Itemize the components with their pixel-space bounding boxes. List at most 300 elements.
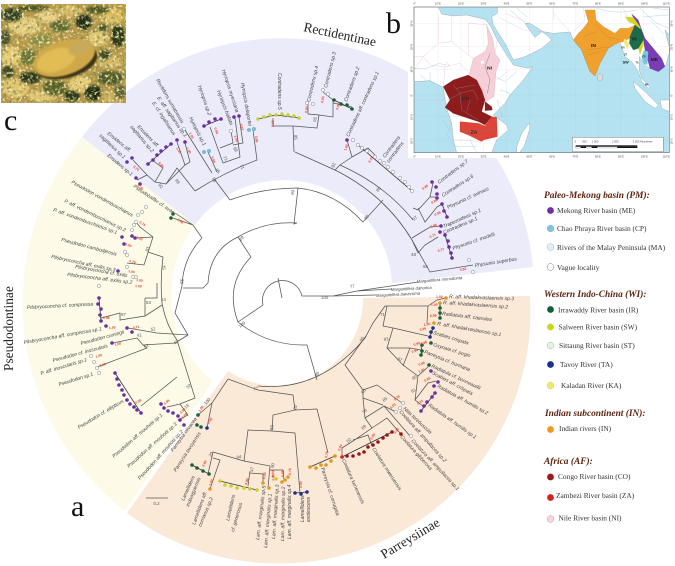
map longitude and latitude ticks: 30°E xyxy=(481,154,487,158)
map longitude and latitude ticks: 90°E xyxy=(618,154,624,158)
labels: bootstrap support values: 85 xyxy=(314,370,321,378)
labels: bootstrap support values: 16 xyxy=(183,402,191,410)
labels: Pseudodontinae species names: Pilsbryoconcha aff. compressa sp.1 xyxy=(23,326,102,346)
panel label: c: c xyxy=(4,104,17,137)
labels: posterior probabilities in red: 0.96 xyxy=(393,427,400,435)
panel: map background frame xyxy=(408,0,675,158)
labels: bootstrap support values: 90 xyxy=(270,462,275,468)
map scale box: 500 xyxy=(582,140,587,144)
map longitude and latitude ticks: 10°E xyxy=(435,2,441,6)
labels: posterior probabilities in red: 0.75 xyxy=(288,468,292,475)
heading: Parreysiinae: Parreysiinae xyxy=(378,515,442,562)
legend item: Irrawaddy: Irrawaddy River basin (IR) xyxy=(558,306,639,314)
labels: posterior probabilities in red: 0.91 xyxy=(416,399,424,406)
labels: posterior probabilities in red: 1.00 xyxy=(188,132,195,140)
labels: Parreysiinae species names: R. aff. khadakvaslaensis sp.3 xyxy=(449,294,514,302)
labels: Parreysiinae species names: Coelatura aff. ampullacea sp.1 xyxy=(410,438,460,492)
labels: posterior probabilities in red: 1.00 xyxy=(95,353,103,359)
labels: outgroup Margaritifera species: Margaritifera laevissima xyxy=(376,291,421,298)
map longitude and latitude ticks: 30°N xyxy=(670,21,674,27)
labels: bootstrap support values: 100 xyxy=(237,320,247,329)
labels: posterior probabilities in red: 1.00 xyxy=(136,184,144,191)
labels: Rectidentinae species names: sagittarius sp.1 xyxy=(98,133,126,161)
labels: Rectidentinae species names: Hyriopsis bialata xyxy=(215,90,234,126)
labels: posterior probabilities in red: 1.00 xyxy=(233,135,239,143)
labels: posterior probabilities in red: 1.00 xyxy=(136,235,143,242)
map region: Mekong xyxy=(632,14,665,72)
labels: Pseudodontinae species names: Pseudodon aff. mouhotii sp.1 xyxy=(111,412,164,460)
labels: posterior probabilities in red: 0.98 xyxy=(430,198,438,205)
map longitude and latitude ticks: 50°E xyxy=(526,2,532,6)
labels: bootstrap support values: 89 xyxy=(238,234,245,242)
labels: bootstrap support values: 53 xyxy=(146,300,151,305)
labels: bootstrap support values: 93 xyxy=(383,336,390,342)
chart: tip dots Indian rivers orange xyxy=(208,296,448,491)
map scale box: 1 000 xyxy=(592,140,599,144)
map longitude and latitude ticks: 40°E xyxy=(504,154,510,158)
panel label: b: b xyxy=(386,7,401,40)
map basin codes: CO xyxy=(462,96,469,102)
labels: outgroup Margaritifera species: Margaritifera monodonta xyxy=(417,275,463,284)
labels: posterior probabilities in red: 0.82 xyxy=(459,267,467,272)
labels: bootstrap support values: 98 xyxy=(211,177,218,183)
panel: Rectidentinae sector background xyxy=(82,38,533,283)
chart: tip dots Chao Phraya blue xyxy=(202,127,256,154)
map graticule xyxy=(414,7,669,153)
map scale box: 0 xyxy=(575,140,577,144)
legend item: Chao Phraya: Chao Phraya River basin (CP) xyxy=(557,224,647,233)
labels: Parreysiinae species names: Lamellidens aff. xyxy=(191,491,209,526)
labels: Parreysiinae species names: Parreysia cf. burmana xyxy=(423,349,471,373)
labels: Parreysiinae species names: Lam. aff. marginalis sp.3 xyxy=(271,484,281,539)
labels: Parreysiinae species names: R. aff. khadakvaslaensis sp.1 xyxy=(437,321,502,338)
map region: Nile xyxy=(469,25,500,102)
labels: Parreysiinae species names: corrianus sp.2 xyxy=(197,496,215,528)
labels: posterior probabilities in red: 1.00 xyxy=(125,242,132,248)
labels: bootstrap support values: 81 xyxy=(410,387,417,394)
labels: Rectidentinae species names: Hyriopsis delaportei xyxy=(239,82,253,127)
labels: Rectidentinae species names xyxy=(98,51,518,269)
labels: bootstrap support values: 41 xyxy=(136,332,143,338)
chart: thickened terminal branches xyxy=(99,100,452,493)
labels: bootstrap support values: 85 xyxy=(359,335,366,342)
panel label: a: a xyxy=(71,490,84,523)
heading: Rectidentinae: Rectidentinae xyxy=(302,19,378,49)
labels: bootstrap support values: 14 xyxy=(161,297,166,302)
labels: outgroup Margaritifera species xyxy=(376,275,463,298)
map longitude and latitude ticks: 20°E xyxy=(458,2,464,6)
labels: bootstrap support values: 99 xyxy=(290,189,295,195)
map rivers over Africa xyxy=(448,53,495,132)
map rivers over India xyxy=(583,23,620,55)
map longitude and latitude ticks: 60°E xyxy=(549,154,555,158)
labels: bootstrap support values: 99 xyxy=(232,146,239,153)
labels: Rectidentinae species names: E. aff. sagittarius sp.1 xyxy=(155,96,188,139)
labels: posterior probabilities in red: 1.00 xyxy=(109,325,116,330)
map longitude and latitude ticks: 70°E xyxy=(572,154,578,158)
labels: Rectidentinae species names: sagittarius sp.2 xyxy=(128,124,155,154)
labels: bootstrap support values: 71 xyxy=(380,312,385,317)
labels: posterior probabilities in red: 0.98 xyxy=(176,218,184,225)
labels: Rectidentinae species names: Hyriopsis sp.1 xyxy=(187,116,207,147)
labels: Parreysiinae species names: Nitia teretiuscula xyxy=(402,406,433,436)
labels: Parreysiinae species names: indawgyiensis xyxy=(185,476,203,508)
map basin codes: NI xyxy=(487,66,493,72)
labels: bootstrap support values: 52 xyxy=(150,326,157,332)
icon: mussel shell xyxy=(32,38,98,80)
labels: Parreysiinae species names: Parreysia cf. corrugata xyxy=(319,467,340,517)
labels: Pseudodontinae species names xyxy=(23,180,185,481)
labels: Pseudodontinae species names: P. aff. vondembuschianus sp.1 xyxy=(52,207,118,236)
labels: bootstrap support values: 71 xyxy=(222,155,229,162)
legend heading: Indian subcontinent: Indian subcontinent (IN): xyxy=(544,408,646,419)
labels: posterior probabilities in red: 0.98 xyxy=(244,478,250,485)
labels: posterior probabilities in red: 0.99 xyxy=(430,313,437,318)
labels: posterior probabilities in red: 0.94 xyxy=(299,481,303,488)
labels: bootstrap support values: 47 xyxy=(249,466,255,472)
map longitude and latitude ticks: 10°N xyxy=(409,67,413,73)
labels: posterior probabilities in red: 0.94 xyxy=(411,348,419,354)
legend item: Mekong: Mekong River basin (ME) xyxy=(557,206,636,215)
labels: Pseudodontinae species names: Pilsbryoconcha aff. exilis sp.3 xyxy=(51,254,116,274)
labels: Parreysiinae species names: Scabies aff. crispata xyxy=(431,370,474,397)
map region: Chao Phraya xyxy=(642,50,648,65)
labels: posterior probabilities in red: 0.96 xyxy=(418,361,426,367)
map longitude and latitude ticks: 110°E xyxy=(663,154,670,158)
legend item: vague locality: Vague locality xyxy=(557,263,600,272)
labels: posterior probabilities in red: 0.90 xyxy=(271,120,275,127)
map longitude and latitude ticks: 20°S xyxy=(409,138,413,144)
scale bar: 0.2 xyxy=(154,501,160,506)
map basin codes: SW xyxy=(623,60,629,64)
labels: Rectidentinae species names: Contradens sp.3 xyxy=(323,51,338,88)
map land: Africa xyxy=(414,7,533,153)
map region: Irrawaddy xyxy=(629,25,643,50)
map frame xyxy=(414,7,669,153)
labels: posterior probabilities in red: 0.98 xyxy=(335,103,341,110)
labels: posterior probabilities in red: 0.77 xyxy=(429,233,437,239)
legend heading: Paleo-Mekong: Paleo-Mekong basin (PM): xyxy=(544,190,650,201)
labels: posterior probabilities in red: 0.92 xyxy=(239,123,244,131)
labels: Rectidentinae species names: Ensidens aff. xyxy=(106,131,132,154)
labels: Parreysiinae species names: Lam. aff. marginalis sp.4 xyxy=(287,484,293,539)
map basin codes: KA xyxy=(621,47,625,50)
labels: bootstrap support values: 99 xyxy=(411,374,418,381)
labels: posterior probabilities in red: 0.96 xyxy=(434,210,442,217)
map sea xyxy=(414,7,669,153)
labels: Pseudodontinae species names: P. aff. inoscularis sp.1 xyxy=(40,357,88,377)
labels: Parreysiinae species names: Radiatula aff. humilis sp.2 xyxy=(436,384,489,417)
map basin codes: MA xyxy=(645,83,649,86)
labels: posterior probabilities in red: 0.86 xyxy=(262,472,267,479)
labels: posterior probabilities in red: 0.96 xyxy=(210,156,216,164)
outgroup root branches xyxy=(238,278,418,322)
map longitude and latitude ticks: 10°E xyxy=(435,154,441,158)
labels: Parreysiinae species names: Lamellidens xyxy=(300,495,306,522)
labels: bootstrap support values: 77 xyxy=(350,284,356,289)
labels: Rectidentinae species names: Contradens sp.6 xyxy=(441,174,475,199)
labels: bootstrap support values: 86 xyxy=(360,387,367,395)
labels: Rectidentinae species names: Ensidens aff. xyxy=(136,124,160,149)
labels: bootstrap support values: 94 xyxy=(236,454,243,460)
labels: Pseudodontinae species names: Pseudodon sp.1 xyxy=(58,372,94,388)
map region: India xyxy=(573,10,635,76)
labels: posterior probabilities in red: 0.85 xyxy=(201,460,208,467)
panel: legend xyxy=(543,190,666,522)
labels: posterior probabilities in red: 1.00 xyxy=(208,479,214,486)
map longitude and latitude ticks: 0° xyxy=(670,94,674,97)
labels: Parreysiinae species names: cf. generosus xyxy=(230,502,244,533)
labels: bootstrap support values: 85 xyxy=(381,395,389,403)
chart: tip dots Mekong purple xyxy=(96,114,454,427)
labels: Rectidentinae species names: E. cf. ingallsianus xyxy=(150,101,177,137)
labels: bootstrap support values: 99 xyxy=(174,178,181,185)
labels: posterior probabilities in red: 1.00 xyxy=(128,269,135,274)
labels: posterior probabilities in red: 0.85 xyxy=(157,161,165,169)
labels: posterior probabilities in red: 1.00 xyxy=(436,295,443,299)
labels: Rectidentinae species names: Contradens sp.4 xyxy=(306,65,320,102)
labels: Parreysiinae species names: Lam. aff. marginalis sp.1 xyxy=(263,493,274,548)
labels: bootstrap support values: 100 xyxy=(321,295,329,300)
labels: posterior probabilities in red: 1.00 xyxy=(198,405,205,413)
labels: posterior probabilities in red: 0.94 xyxy=(337,444,343,451)
labels: bootstrap support values: 89 xyxy=(360,423,368,431)
labels: Parreysiinae species names: Radiatula aff. humilis sp.1 xyxy=(427,403,477,441)
labels: posterior probabilities in red: 0.96 xyxy=(420,340,428,346)
map land: Eurasia xyxy=(492,7,670,88)
labels: posterior probabilities in red: 0.79 xyxy=(129,259,136,265)
chart: tip dots Tavoy navy xyxy=(205,326,435,496)
map longitude and latitude ticks: 50°E xyxy=(526,154,532,158)
labels: Parreysiinae species names: R. aff. khadakvaslaensis sp.2 xyxy=(443,300,508,311)
labels: bootstrap support values: 93 xyxy=(144,246,151,252)
labels: bootstrap support values: 55 xyxy=(423,264,428,269)
labels: Rectidentinae species names: Ensidens sp.1 xyxy=(106,153,134,178)
labels: posterior probabilities in red: 1.00 xyxy=(175,146,182,154)
map longitude and latitude ticks: 100°E xyxy=(641,2,648,6)
scale bar xyxy=(146,498,168,506)
legend item: Indian rivers: Indian rivers (IN) xyxy=(559,424,612,433)
map longitude and latitude ticks: 80°E xyxy=(595,154,601,158)
map longitude and latitude ticks xyxy=(409,2,674,158)
labels: Parreysiinae species names: Coelatura mweruensis xyxy=(370,447,403,492)
labels: posterior probabilities in red: 1.00 xyxy=(389,402,397,410)
map borders in pink xyxy=(414,7,630,143)
legend item: Kaladan: Kaladan River (KA) xyxy=(561,381,622,390)
labels: Parreysiinae species names: Coelatura kunenensis xyxy=(340,458,366,505)
labels: bootstrap support values: 29 xyxy=(208,450,215,458)
labels: Pseudodontinae species names: Pseudodon aff. mouhotii sp.2 xyxy=(137,429,185,481)
map longitude and latitude ticks: 0° xyxy=(409,94,413,97)
labels: bootstrap support values: 32 xyxy=(185,382,193,390)
labels: posterior probabilities in red: 0.83 xyxy=(99,362,107,368)
labels: posterior probabilities in red: 1.00 xyxy=(136,278,143,283)
map scale box xyxy=(572,137,663,152)
labels: Pseudodontinae species names: Pseudodon cumingii xyxy=(80,329,126,347)
labels: posterior probabilities in red: 0.96 xyxy=(419,326,427,332)
labels: posterior probabilities in red: 0.76 xyxy=(138,220,146,227)
labels: bootstrap support values: 95 xyxy=(293,135,298,141)
labels: Rectidentinae species names: Hyriopsis sp.2 xyxy=(196,85,212,117)
labels: Rectidentinae species names: Trapezoideus sp.1 xyxy=(442,208,482,230)
legend heading: Africa: Africa (AF): xyxy=(543,456,593,467)
labels: bootstrap support values: 86 xyxy=(363,213,370,221)
labels: posterior probabilities in red: 0.95 xyxy=(430,223,438,229)
labels: bootstrap support values: 86 xyxy=(375,185,382,193)
map basin codes: ST xyxy=(624,55,628,57)
labels: bootstrap support values: 97 xyxy=(397,356,403,363)
map Nile lake xyxy=(481,61,484,64)
map basin codes: TA xyxy=(636,61,639,64)
labels: Pseudodontinae species names: Pseudodon cambodjensis xyxy=(60,237,118,258)
labels: posterior probabilities in red: 0.41 xyxy=(367,156,374,164)
labels: outgroup Margaritifera species: Margaritifera dahurica xyxy=(391,285,432,292)
map longitude and latitude ticks: 10°N xyxy=(670,67,674,73)
labels: Rectidentinae species names: Physunio cf. eximius xyxy=(446,186,491,211)
labels: bootstrap support values xyxy=(121,116,428,472)
labels: posterior probabilities in red: 1.00 xyxy=(271,474,276,481)
labels: bootstrap support values: 42 xyxy=(172,338,180,346)
labels: posterior probabilities in red: 0.96 xyxy=(254,136,259,143)
labels: posterior probabilities in red: 0.93 xyxy=(271,470,275,477)
labels: Pseudodontinae species names: Pilsbryoconcha aff. exilis sp.2 xyxy=(67,272,133,286)
labels: bootstrap support values: 92 xyxy=(330,162,337,168)
labels: Pseudodontinae species names: Pseudodon vondembuschianus xyxy=(70,180,134,219)
map basin codes: IR xyxy=(632,36,637,42)
legend item: Tavoy: Tavoy River (TA) xyxy=(560,360,613,369)
map land: Madagascar and islands xyxy=(517,74,669,153)
map scale box: 2 000 xyxy=(612,140,619,144)
labels: bootstrap support values: 52 xyxy=(345,436,353,444)
labels: posterior probabilities in red: 1.00 xyxy=(423,322,431,327)
labels: posterior probabilities in red: 0.96 xyxy=(103,316,110,320)
map region: Salween xyxy=(625,17,644,55)
map basin codes: ME xyxy=(651,57,659,63)
labels: Rectidentinae species names: Contradens aff. contradens sp.1 xyxy=(345,71,381,138)
labels: Parreysiinae species names: Coelatura aff. ampullacea sp.2 xyxy=(398,409,447,464)
map basin codes xyxy=(462,36,659,135)
labels: Rectidentinae species names: Contradens sp.2 xyxy=(343,66,362,103)
labels: bootstrap support values: 85 xyxy=(214,167,222,175)
chart: tip dots white and pale localities xyxy=(89,88,475,438)
labels: Parreysiinae species names: Parreysia tavoyensis xyxy=(173,431,203,473)
chart: tip dots Congo and Zambezi red xyxy=(340,430,403,459)
chart: tip dots Irrawaddy green xyxy=(169,98,442,476)
map region: Congo xyxy=(443,75,492,125)
labels: posterior probabilities in red: 0.76 xyxy=(393,394,401,402)
labels: Rectidentinae species names: contradens xyxy=(386,140,406,164)
labels: posterior probabilities in red: 0.93 xyxy=(320,96,325,103)
map longitude and latitude ticks: 30°N xyxy=(409,21,413,27)
labels: bootstrap support values: 97 xyxy=(411,214,419,222)
map region: Zambezi xyxy=(460,117,497,142)
map basin codes: ZA xyxy=(471,129,478,135)
labels: posterior probabilities in red: 0.71 xyxy=(132,325,140,330)
labels: bootstrap support values: 53 xyxy=(269,424,274,430)
chart: phylogenetic tree branches xyxy=(97,92,473,493)
labels: posterior probabilities in red: 1.00 xyxy=(431,303,438,307)
legend heading: Western Indo-China: Western Indo-China (WI): xyxy=(544,289,646,300)
labels: posterior probabilities in red: 1.00 xyxy=(343,144,349,151)
labels: posterior probabilities in red: 0.99 xyxy=(213,127,219,135)
labels: posterior probabilities in red: 0.99 xyxy=(181,412,188,420)
legend item: Malay Peninsula: Rivers of the Malay Peninsula (MA) xyxy=(557,243,666,252)
labels: Rectidentinae species names: Hyriopsis myersiana xyxy=(220,69,240,114)
labels: Rectidentinae species names: Contradens sp.1 xyxy=(442,216,479,236)
map longitude and latitude ticks: 70°E xyxy=(572,2,578,6)
map longitude and latitude ticks: 40°E xyxy=(504,2,510,6)
labels: Pseudodontinae species names: Pseudobaffer cf. avae xyxy=(132,184,176,216)
labels: Parreysiinae species names xyxy=(170,294,514,548)
labels: posterior probabilities in red: 0.76 xyxy=(324,451,329,458)
labels: Pseudodontinae species names: Pilsbryoconcha cf. exilis xyxy=(75,264,128,279)
labels: posterior probabilities in red: 1.00 xyxy=(135,284,142,289)
labels: Parreysiinae species names: Oxynaia cf. pugio xyxy=(432,342,471,359)
labels: posterior probabilities in red: 0.99 xyxy=(281,470,285,477)
labels: posterior probabilities in red: 0.75 xyxy=(132,165,140,172)
labels: posterior probabilities in red: 0.93 xyxy=(304,106,309,113)
map rivers in blue xyxy=(414,8,669,153)
labels: Parreysiinae species names: Scabies crispata xyxy=(432,330,469,347)
labels: Rectidentinae species names: Contradens sp.7 xyxy=(437,159,470,186)
labels: Rectidentinae species names: Physunio superbus xyxy=(474,256,518,269)
labels: bootstrap support values: 97 xyxy=(121,312,126,317)
heading: Pseudodontinae: Pseudodontinae xyxy=(1,286,16,371)
labels: Parreysiinae species names: Lam. aff. marginalis sp.5 xyxy=(255,485,268,540)
panel: Pseudodontinae sector background xyxy=(23,137,213,511)
labels: posterior probabilities in red: 1.00 xyxy=(185,146,192,154)
labels: bootstrap support values: 92 xyxy=(157,182,165,190)
labels: bootstrap support values: 43 xyxy=(143,343,150,349)
labels: bootstrap support values: 55 xyxy=(179,278,185,284)
labels: posterior probabilities in red: 0.95 xyxy=(163,398,171,406)
labels: Parreysiinae species names: Parreysia olivacea xyxy=(170,416,199,453)
map longitude and latitude ticks: 0° xyxy=(413,154,416,158)
legend item: Congo: Congo River basin (CO) xyxy=(558,472,631,481)
labels: Pseudodontinae species names: Pseudodon aff. mouhotii sp.3 xyxy=(126,422,179,469)
labels: posterior probabilities in red: 0.92 xyxy=(207,417,214,425)
labels: posterior probabilities in red: 0.86 xyxy=(421,184,429,191)
map longitude and latitude ticks: 10°S xyxy=(670,114,674,120)
labels: posterior probabilities in red: 0.98 xyxy=(134,398,142,405)
map longitude and latitude ticks: 60°E xyxy=(549,2,555,6)
legend item: Zambezi: Zambezi River basin (ZA) xyxy=(556,491,635,500)
legend item: Salween: Salween River basin (SW) xyxy=(558,322,638,332)
labels: bootstrap support values: 92 xyxy=(312,116,318,122)
labels: Parreysiinae species names: Coelatura gibberosa xyxy=(399,434,433,472)
legend item: Sittaung: Sittaung River basin (ST) xyxy=(559,341,635,350)
labels: Parreysiinae species names: Lamellidens xyxy=(180,475,197,502)
map longitude and latitude ticks: 90°E xyxy=(618,2,624,6)
map basin codes: IN xyxy=(591,43,596,49)
map longitude and latitude ticks: 20°N xyxy=(409,44,413,50)
labels: Parreysiinae species names: Lam. aff. marginalis sp.2 xyxy=(280,486,287,541)
map basin codes: CP xyxy=(642,57,646,59)
panel: Parreysiinae sector background xyxy=(127,296,530,564)
chart: river basin map xyxy=(409,2,674,158)
labels: bootstrap support values: 77 xyxy=(253,385,259,392)
map longitude and latitude ticks: 110°E xyxy=(663,2,670,6)
labels: Pseudodontinae species names: Pseudodon cf. ellipticus xyxy=(77,398,125,431)
labels: Rectidentinae species names: Contradens sp.5 xyxy=(276,73,282,110)
map longitude and latitude ticks: 80°E xyxy=(595,2,601,6)
map longitude and latitude ticks: 10°S xyxy=(409,114,413,120)
map scale box: 3 000 Kilomètres xyxy=(633,140,653,144)
labels: posterior probabilities in red: 0.95 xyxy=(413,341,421,347)
labels: posterior probabilities in red: 0.96 xyxy=(179,407,186,415)
labels: bootstrap support values: 82 xyxy=(292,404,298,410)
panel: photo of mussel xyxy=(0,4,126,103)
